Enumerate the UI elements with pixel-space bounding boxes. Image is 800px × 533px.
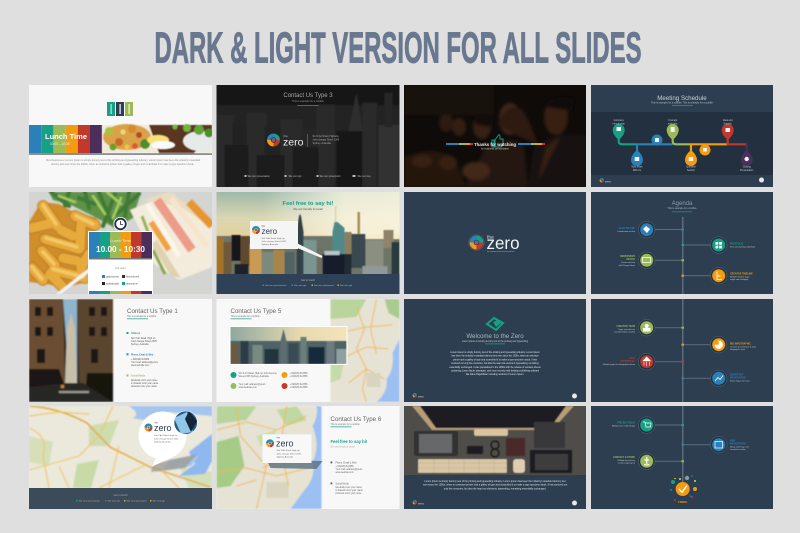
heading: thanks for watching: Thanks for watching (474, 142, 516, 147)
node: contact us style: Multiple item theme (618, 459, 636, 462)
slide: lunch time light (29, 85, 212, 187)
node: pricing table: Multiple price table design (612, 424, 635, 428)
subtitle: Lorem Ipsum is simply dummy text of the printing and typesetting (462, 340, 529, 343)
fries (29, 202, 97, 288)
card speakers (102, 267, 140, 286)
timeline labels: Question (686, 166, 696, 168)
photo: dark audience (404, 85, 586, 187)
phone block: Phone, Email & Web (131, 354, 154, 356)
logo: the zero large: zero (486, 233, 520, 253)
callout card: John change Street 2345 (262, 240, 287, 243)
contact footer band (29, 488, 212, 509)
node: infographic: Creative presentation & show (730, 346, 757, 348)
contact item: fax: + 62(026) 8x3356 (290, 387, 308, 389)
heading: contact us type 6: Contact Us Type 6 (330, 416, 382, 423)
address block: Sydney, Australia (131, 343, 149, 346)
callout card: Sixl 3 Art Road, High up (262, 237, 286, 240)
node: smart art: Smart mapp start now (730, 380, 750, 382)
body text: Most business en Lorem Ipsum is simply dummy text of the printing and typesetting industry. Lorem Ipsum has been the industry's standard (46, 159, 201, 162)
icon: clock (114, 217, 128, 231)
photo: circular inset (174, 411, 197, 434)
social block (330, 482, 364, 495)
node: who we are: Introduction section (618, 230, 635, 233)
contact footer: Site zero ppt (288, 175, 302, 178)
contact footer (244, 175, 372, 178)
node: responsive device: DEVICE (626, 259, 635, 261)
callout card: the (262, 225, 266, 228)
node: contact us style: CONTACT & STORE (613, 456, 635, 459)
social block: Social Media (336, 484, 349, 486)
slide: agenda timeline (591, 192, 773, 294)
logo: the zero large (469, 233, 520, 253)
map (29, 406, 212, 488)
contact footer: Site zero key (358, 175, 372, 178)
timeline pins (613, 124, 753, 166)
subtitle: This is example for a subtitle (292, 100, 324, 103)
colour stripes banner (29, 125, 212, 155)
phone block: Your mail: address@yours (336, 468, 363, 471)
callout card (250, 221, 322, 258)
slide: logo dark (404, 192, 586, 294)
logo: the zero: zero (283, 136, 304, 148)
node: infographic (682, 336, 757, 353)
node: contact us style: contact page layout (618, 462, 635, 464)
photo: skyline strip (230, 326, 348, 365)
logo card: the (276, 436, 281, 440)
node: creative timeline: single and multipage (730, 278, 749, 281)
sandwich (130, 193, 214, 280)
node: creative timeline: Multiple timeline page (730, 276, 750, 278)
vertical axis (682, 217, 684, 294)
time label: 10.00 – 10:30 (50, 142, 70, 146)
photo: dark city (216, 85, 400, 187)
contact footer band: Site zero powerpoint (126, 500, 147, 502)
speech bubble: zero (154, 423, 172, 433)
map panel (330, 299, 400, 402)
card speakers: photodune (126, 282, 138, 286)
contact footer band: Site zero ppt (294, 284, 307, 287)
social block: facebook.com/ your name (336, 486, 363, 489)
node: map infographic (682, 436, 749, 453)
node: map infographic: MAP (730, 440, 736, 442)
node: who we are (618, 221, 684, 238)
subtitle: This is example for a subtitle (127, 315, 157, 318)
phone block: Phone, Email & Web (336, 462, 357, 464)
heading: agenda: Agenda (672, 201, 693, 207)
heading: lunch time: Lunch Time (45, 132, 87, 141)
node: map infographic: Many world map and (730, 446, 749, 448)
icon: thumbs up (492, 135, 503, 147)
contact footer band: Site zero ppt (340, 284, 353, 287)
phone block: Your mail: address@yours (131, 361, 159, 364)
phone block: www.website.com (336, 471, 354, 474)
slide: welcome to the zero (404, 299, 586, 402)
body text: like Aldus PageMaker including versions of Lorem Ipsum. (466, 373, 524, 376)
photo: desk with devices (404, 406, 586, 475)
logo card: John change Street 2345 (276, 452, 302, 455)
timeline labels: Data and (723, 119, 733, 122)
card speakers: Our team (115, 267, 126, 270)
node: smart art: SMART ART (730, 374, 744, 376)
footer badge (759, 178, 764, 182)
footer logo (413, 394, 424, 398)
timeline labels: Company (614, 119, 625, 122)
contact footer band: Get in touch (114, 493, 128, 497)
slide: map callout (29, 406, 212, 509)
body text: dummy text ever since the 1500s, when an unknown printer took a galley of type and scrambled it to make a type specimen book. (51, 163, 195, 166)
contact footer: Site zero presentation (248, 175, 271, 178)
slide: meeting schedule (591, 85, 773, 187)
card speakers: themeforest (126, 276, 140, 278)
node: smart art (682, 370, 750, 387)
timeline labels: Concept (668, 119, 677, 122)
body text: containing Lorem Ipsum passages, and more recently with desktop publishing software (451, 370, 540, 372)
callout card: zero (262, 227, 278, 236)
slide: feel free to say hi (216, 192, 400, 294)
slide: thanks for watching (404, 85, 586, 187)
logo card: Sydney, Australia (276, 456, 294, 459)
node: portfolio: View and download portfolio (730, 246, 756, 248)
heading: contact us type 3: Contact Us Type 3 (283, 93, 333, 99)
contact footer band: Site zero ppt (152, 500, 165, 502)
speech bubble (138, 412, 186, 467)
timeline labels: Introduction (612, 122, 626, 125)
finish badge with confetti (670, 475, 697, 501)
slide: contact us type 1 (29, 299, 212, 402)
node: creative team (614, 319, 684, 336)
slide: contact us type 6 (216, 406, 400, 509)
node: creative timeline: CREATIVE TIMELINE (730, 272, 753, 276)
phone block: + 62(026) 8x3356 (336, 466, 354, 468)
node: portfolio: PORTFOLIO (730, 244, 744, 246)
slide: desk photo (404, 406, 586, 509)
contact footer band: Site zero ppt (108, 500, 120, 502)
card heading: Lunch Time (110, 238, 132, 243)
icon: handshake (487, 318, 503, 330)
map shadow shape (151, 454, 197, 472)
node: contact us style (613, 453, 684, 470)
vertical axis (682, 299, 684, 402)
address text: John change Street 2345 (312, 138, 340, 142)
contact item: web: www.website.com (238, 386, 257, 389)
accent underline (230, 318, 252, 320)
logo: the zero large: the creative business presentation (487, 250, 514, 253)
callout subtitle: We are friendly & social (330, 446, 355, 448)
body text: Lorem Ipsum is simply dummy text of the printing and typesetting industry. Lorem Ipsum has been the industry's standard dummy text (424, 480, 566, 483)
phone block: www.website.com (131, 364, 149, 367)
logo: the zero (269, 134, 304, 148)
logo card (262, 434, 322, 469)
contact footer band: Site zero presentation (78, 500, 101, 502)
contact item: address (230, 372, 277, 378)
timeline labels: and Idea (668, 122, 678, 125)
subtitle: This is example for a subtitle (330, 423, 360, 426)
finish label: FINISH (678, 500, 687, 504)
body text: printer took a galley of type and scrambled it to make a type specimen book. It has (453, 358, 538, 361)
heading: meeting schedule: Meeting Schedule (657, 95, 707, 102)
node: infographic: BIG INFOGRAPHIC (730, 342, 751, 346)
heading: feel free: Feel free to say hi! (283, 201, 334, 207)
node: infographic: infographic show (730, 349, 746, 351)
address text (312, 135, 340, 145)
rainbow bar left (446, 143, 473, 145)
timeline labels: Presentation (740, 169, 754, 172)
body text (46, 159, 201, 166)
slide: lunch photo card (29, 192, 212, 294)
node: creative team: CREATIVE TEAM (616, 325, 635, 328)
node: responsive device (619, 252, 684, 269)
address text: Sydney, Australia (312, 142, 331, 145)
callout card: Sydney, Australia (262, 243, 279, 246)
accent underline (672, 210, 692, 213)
heading: contact us type 1: Contact Us Type 1 (127, 308, 178, 315)
logo card: zero (276, 439, 294, 449)
contact item: phone (282, 372, 308, 378)
node: responsive device: RESPONSIVE (620, 256, 635, 258)
slide: timeline finish (591, 406, 773, 509)
contact item: address: Street 2345 Sydney, Australia (238, 375, 269, 378)
subtitle: This is example for a subtitle (667, 207, 697, 210)
contact item: phone: + 62(026) 8x3356 (290, 376, 308, 378)
card speakers: graphicriver (106, 276, 119, 278)
salad greens (49, 192, 141, 228)
contact footer band: Get in touch (301, 278, 316, 282)
node: pricing table: PRICING TABLE (617, 422, 635, 424)
contact item: address: Sixl 3 Art Road, High up John Avenue (238, 372, 277, 375)
body text: survived not only five centuries, but also the leap into electronic typesetting, remaining (451, 362, 539, 365)
logo card: Sixl 3 Art Road, High up (276, 449, 301, 452)
social block: pinterest.com/ your name (131, 385, 158, 388)
contact item: web (230, 383, 266, 389)
node: map infographic: countries location (730, 448, 746, 451)
phone block (126, 353, 159, 367)
subtitle: We are friendly & social (293, 207, 323, 211)
timeline labels: Closing (743, 166, 751, 168)
photo: street canyon (29, 299, 113, 402)
speech bubble: John change Street 2345 (154, 437, 179, 440)
slide: contact us type 3 (216, 85, 400, 187)
social block: facebook.com/ your name (131, 379, 158, 382)
footer logo: zero (418, 501, 424, 505)
accent underline (330, 426, 352, 428)
logo: the zero: the (284, 134, 288, 138)
speech bubble: Sixl 3 Art Road, High up (154, 434, 178, 437)
social block: in linkedin.com/ your name (131, 382, 159, 385)
contact footer: Site zero powerpoint (320, 175, 341, 178)
address block (126, 332, 157, 346)
photo: fries and sandwich (29, 192, 214, 294)
card speakers: audiojungle (106, 282, 119, 286)
timeline labels: With Us (633, 169, 642, 172)
body text: ever since the 1500s, when an unknown printer took a galley of type and scrambled it to make a type specimen book. It has survived not (423, 484, 567, 487)
node: smart art: INFOGRAPHIC (730, 376, 746, 380)
node: creative team: and information needed (614, 330, 635, 334)
social block (126, 374, 159, 388)
icon: cutlery tiles (107, 102, 133, 116)
body text: Lorem Ipsum is simply dummy text of the printing and typesetting industry. Lorem Ipsum (450, 351, 540, 354)
callout: feel free: Feel free to say hi! (330, 439, 367, 444)
phone block (330, 462, 363, 474)
contact item: fax: + 62(026) 8x3356 (290, 384, 308, 386)
node: data statistic: STATISTICAL (620, 360, 636, 363)
social block: in linkedin.com/ your name (336, 489, 364, 492)
address text: Sixl 3 Art Road, Highway (312, 135, 340, 138)
node: data statistic: Multiple pages for infographic theme (603, 363, 636, 366)
contact footer band: Site zero powerpoint (314, 284, 334, 287)
footer logo (413, 501, 424, 505)
footer logo (600, 179, 611, 183)
footer badge (572, 394, 577, 398)
subtitle: This is example for a subtitle. This is example for a subtitle (651, 102, 714, 104)
contact footer band (216, 274, 400, 294)
footer badge (572, 500, 577, 506)
address block: John change Street 2345 (131, 340, 157, 343)
card: lunch schedule (88, 231, 153, 294)
body text: only five centuries, but also the leap into electronic typesetting, remaining essentially unchanged. (444, 487, 547, 490)
speech bubble: the (154, 420, 158, 424)
card time: 10.00 - 10:30 (96, 245, 145, 254)
node: responsive device: with 8 layout ideas (619, 264, 635, 267)
node: responsive device: Device mockup (621, 262, 636, 264)
address block: Sixl 3 Art Road, High up (131, 337, 156, 340)
logo: the zero large: the (487, 235, 494, 241)
photo: city skyline (216, 206, 400, 276)
accent underline (127, 318, 148, 320)
body text: essentially unchanged. It was popularised in the 1960s with the release of Letraset sheets (449, 366, 541, 369)
heading: welcome: Welcome to the Zero (466, 333, 524, 340)
contact item: fax (282, 383, 308, 389)
heading: contact us type 5: Contact Us Type 5 (230, 308, 282, 315)
timeline labels: Why Work (632, 166, 643, 168)
slide: contact us type 5 (216, 299, 400, 402)
social block: pinterest.com/ your name (336, 492, 362, 495)
contact item: phone: + 62(026) 8x3356 (290, 373, 308, 375)
rainbow bar right (518, 143, 545, 145)
node: who we are: WHAT WE ARE (619, 227, 635, 230)
node: creative team: Dope around team (618, 328, 635, 331)
phone block: + 62(026) 8x3356 (131, 359, 150, 361)
photo: salad (102, 124, 219, 153)
speech bubble: Sydney, Australia (154, 440, 172, 444)
subtitle: This is example for a subtitle (230, 315, 260, 318)
node: creative timeline (682, 267, 753, 284)
contact item: web: Your mail: address@yours (238, 383, 266, 386)
accent underline (672, 104, 693, 107)
map panel (216, 406, 322, 509)
timeline labels: Statistic (724, 122, 733, 125)
body text: has been the industry's standard dummy text ever since the 1500s, when an unknown (451, 355, 539, 358)
accent underline (298, 104, 318, 107)
node: portfolio (682, 237, 756, 253)
node: map infographic: INFOGRAPHIC (730, 442, 746, 446)
subtitle: for business presentation (481, 148, 510, 150)
footer logo: zero (605, 179, 611, 183)
social block: Social Media (131, 376, 146, 378)
slide: timeline continued (591, 299, 773, 402)
contact footer band: Site zero presentation (265, 284, 287, 287)
node: data statistic (603, 353, 684, 370)
node: pricing table (612, 417, 684, 433)
node: data statistic: DATA (629, 357, 635, 360)
timeline labels (612, 119, 754, 172)
timeline chart (619, 132, 747, 157)
body text (449, 351, 541, 376)
body text (423, 480, 567, 490)
address block: Address (131, 332, 141, 335)
timeline labels: Section (687, 169, 696, 172)
accent underline (485, 342, 505, 345)
footer logo: zero (418, 394, 424, 398)
vertical axis (682, 406, 684, 482)
